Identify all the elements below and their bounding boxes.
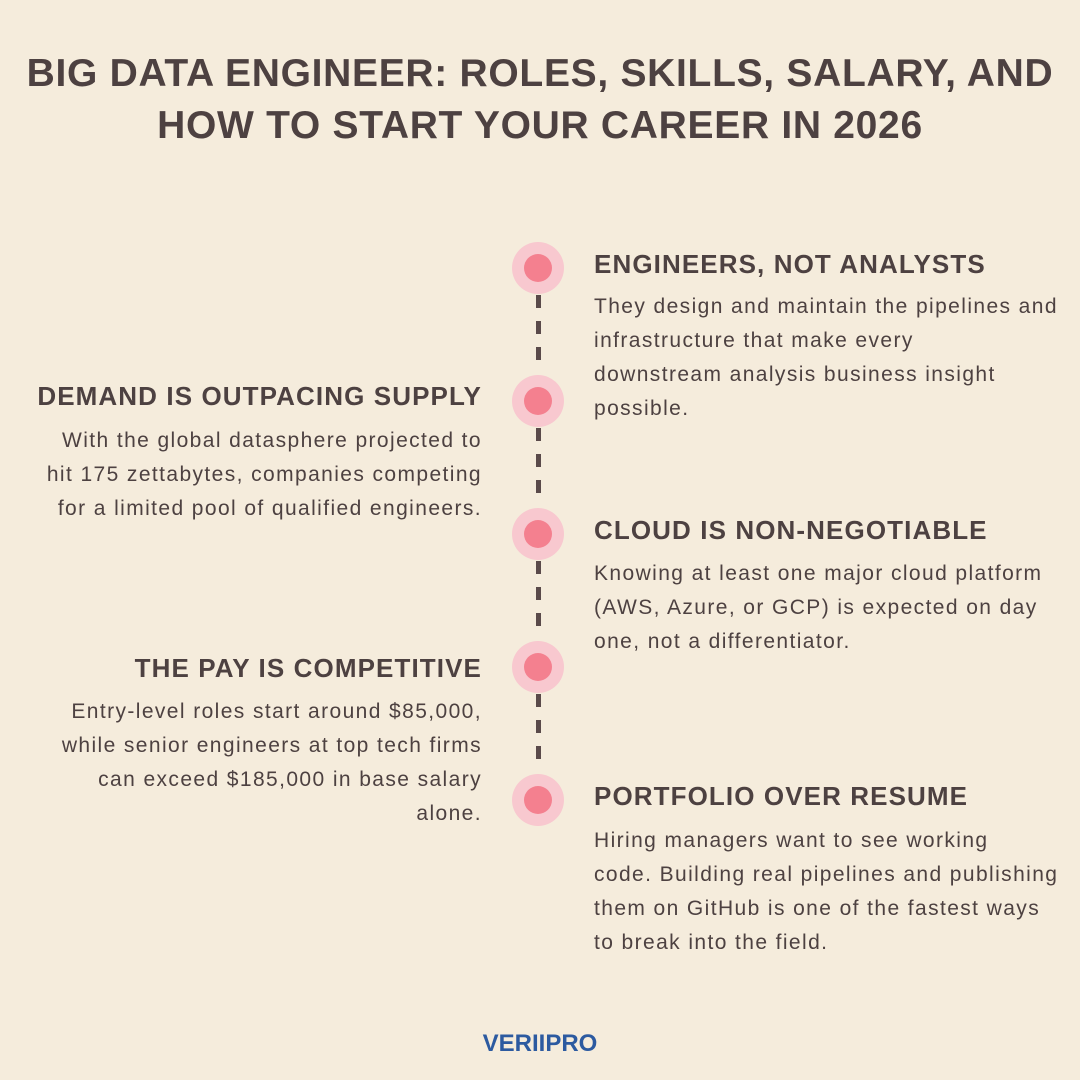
heading: engineers: ENGINEERS, NOT ANALYSTS: [594, 249, 986, 279]
text: engineers: possible.: [594, 397, 689, 420]
text: pay: [62, 700, 482, 825]
text: engineers: [594, 295, 1058, 420]
text: cloud: one, not a differentiator.: [594, 630, 851, 653]
title: HOW TO START YOUR CAREER IN 2026: [157, 104, 923, 147]
text: demand: hit 175 zettabytes, companies competing: [47, 463, 482, 486]
text: demand: With the global datasphere projected to: [62, 429, 482, 452]
heading: pay: THE PAY IS COMPETITIVE: [135, 653, 482, 683]
text: pay: alone.: [416, 802, 482, 825]
text: portfolio: code. Building real pipelines and publishing: [594, 863, 1058, 886]
logo: VERIIPRO: [483, 1030, 597, 1057]
text: pay: can exceed $185,000 in base salary: [98, 768, 482, 791]
text: portfolio: [594, 829, 1058, 954]
heading: demand: DEMAND IS OUTPACING SUPPLY: [37, 381, 482, 411]
text: portfolio: Hiring managers want to see working: [594, 829, 988, 852]
text: cloud: (AWS, Azure, or GCP) is expected on day: [594, 596, 1038, 619]
heading: cloud: CLOUD IS NON-NEGOTIABLE: [594, 515, 988, 545]
text: demand: for a limited pool of qualified engineers.: [58, 497, 482, 520]
title: [27, 52, 1053, 147]
text: cloud: [594, 562, 1042, 653]
heading: portfolio: PORTFOLIO OVER RESUME: [594, 781, 968, 811]
text: portfolio: to break into the field.: [594, 931, 828, 954]
title: BIG DATA ENGINEER: ROLES, SKILLS, SALARY, AND: [27, 52, 1053, 95]
text: portfolio: them on GitHub is one of the fastest ways: [594, 897, 1040, 920]
text: engineers: infrastructure that make every: [594, 329, 914, 352]
text: pay: Entry-level roles start around $85,000,: [71, 700, 482, 723]
text: engineers: They design and maintain the pipelines and: [594, 295, 1058, 318]
timeline: [512, 242, 564, 826]
text: engineers: downstream analysis business insight: [594, 363, 996, 386]
text: cloud: Knowing at least one major cloud platform: [594, 562, 1042, 585]
text: demand: [47, 429, 482, 520]
text: pay: while senior engineers at top tech firms: [62, 734, 482, 757]
